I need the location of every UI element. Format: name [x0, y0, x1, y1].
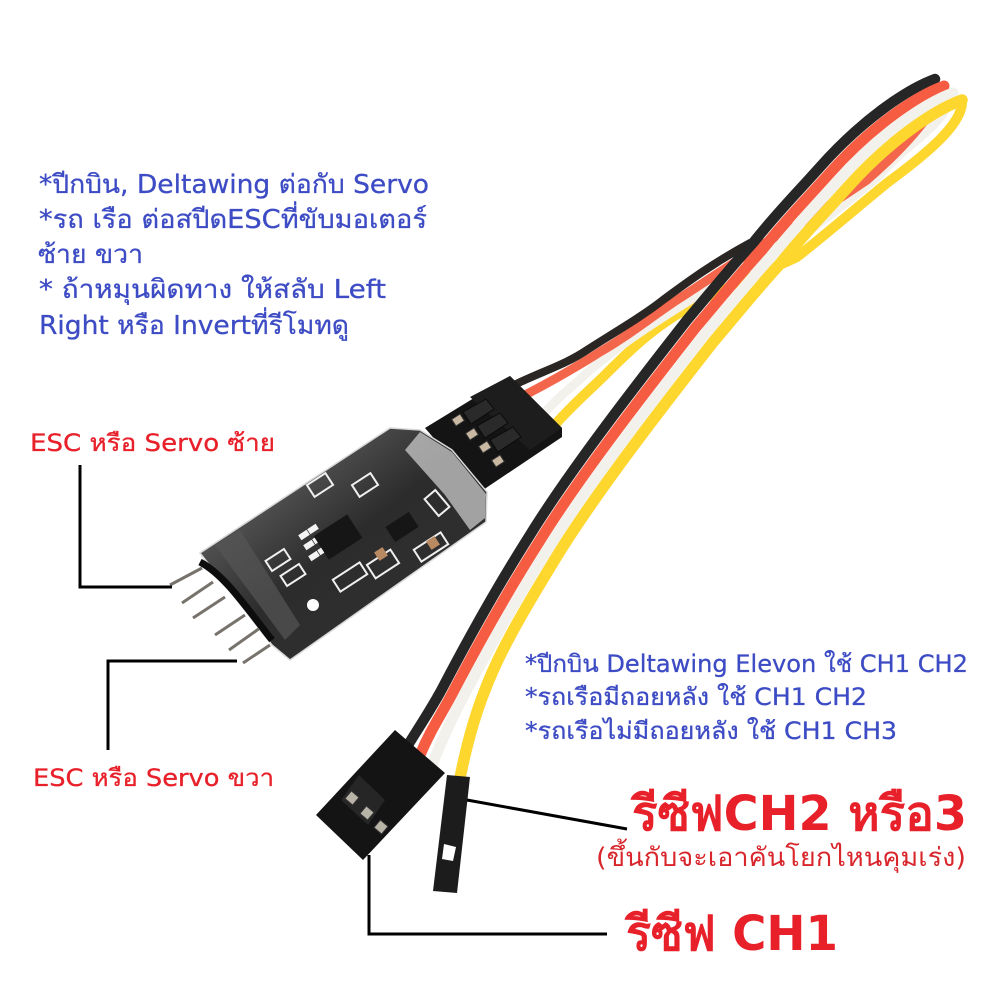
- text block: channel usage: *รถเรือไม่มีถอยหลัง ใช้ CH1 CH3: [525, 717, 897, 745]
- connector: module 4-pin plug: [425, 376, 562, 492]
- text block: usage notes: ซ้าย ขวา: [38, 240, 143, 270]
- module: black header strip: [200, 562, 272, 640]
- wire bundle: front strand to receiver connectors: [405, 79, 962, 778]
- text block: channel usage: [525, 650, 968, 745]
- text block: usage notes: Right หรือ Invertที่รีโมทดู: [39, 307, 349, 341]
- label: receiver CH2 or 3: รีซีฟCH2 หรือ3: [630, 786, 967, 842]
- wire bundle: rear strand to module: [512, 102, 962, 428]
- leader line: CH1: [369, 855, 607, 934]
- label: ESC or Servo right: ESC หรือ Servo ขวา: [33, 764, 274, 792]
- module: header pins: [170, 568, 270, 663]
- connector: receiver CH1 plug: [316, 730, 445, 860]
- text block: channel usage: *ปีกบิน Deltawing Elevon ใช้ CH1 CH2: [525, 650, 968, 678]
- leader line: CH2 or 3: [467, 800, 627, 829]
- leader line: right ESC: [108, 661, 237, 750]
- label: receiver CH1: รีซีฟ CH1: [624, 906, 838, 962]
- text block: channel usage: *รถเรือมีถอยหลัง ใช้ CH1 CH2: [525, 683, 867, 711]
- label: ESC or Servo left: ESC หรือ Servo ซ้าย: [30, 429, 275, 457]
- connector: receiver single-wire plug: [433, 775, 470, 893]
- text block: usage notes: *รถ เรือ ต่อสปีดESCที่ขับมอเตอร์: [39, 201, 427, 235]
- label: throttle stick note: (ขึ้นกับจะเอาคันโยกไหนคุมเร่ง): [596, 838, 966, 873]
- text block: usage notes: *ปีกบิน, Deltawing ต่อกับ Servo: [39, 170, 429, 200]
- text block: usage notes: [38, 170, 429, 341]
- text block: usage notes: * ถ้าหมุนผิดทาง ให้สลับ Left: [39, 275, 386, 305]
- module: shrink-wrapped circuit board: [200, 428, 487, 660]
- leader line: left ESC: [80, 465, 172, 587]
